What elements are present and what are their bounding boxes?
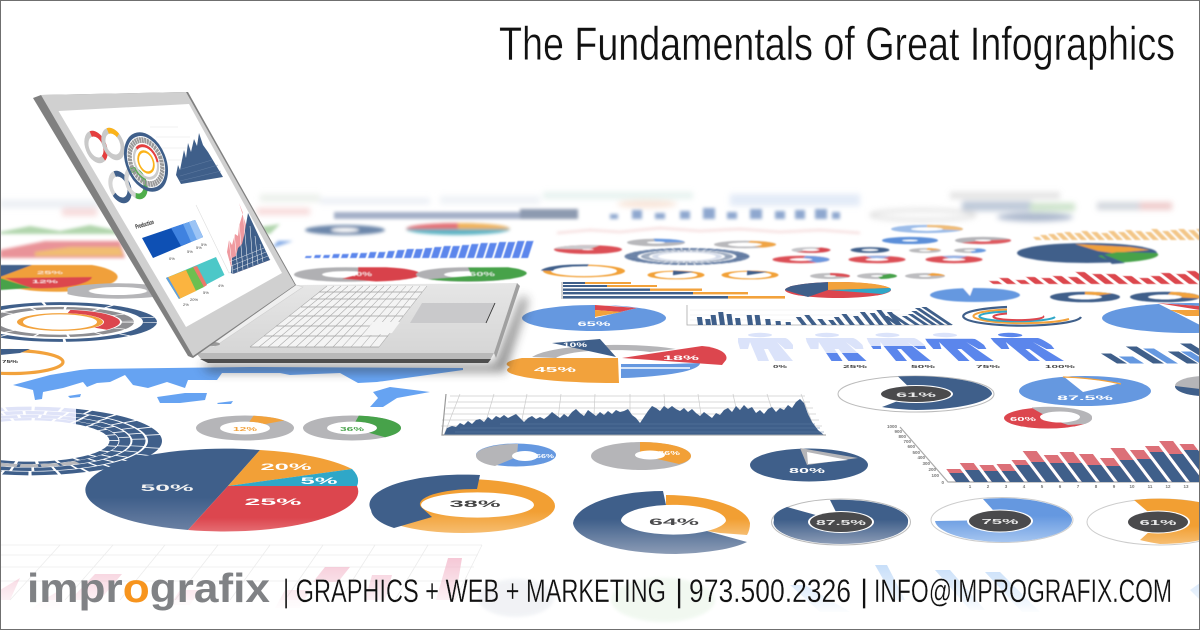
pie light blue 95% bbox=[930, 288, 1020, 302]
pie navy orange green bbox=[1017, 243, 1158, 264]
stacked bars chart: 1 bbox=[969, 484, 972, 489]
main pie chart: 25% bbox=[244, 497, 303, 508]
person 100% bbox=[986, 333, 1075, 369]
stacked bars chart: 5 bbox=[1041, 484, 1044, 489]
stacked bars chart: 0 bbox=[941, 480, 944, 485]
left pie navy orange red green: 12% bbox=[32, 279, 58, 284]
donut 64% bbox=[573, 491, 750, 554]
donut 61% orange bbox=[1087, 499, 1200, 545]
donut 87.5% navy bbox=[772, 499, 910, 545]
pie navy orange teal red bbox=[785, 282, 891, 298]
screen blue bar: 5% bbox=[201, 242, 207, 247]
teal slice 5% bbox=[228, 469, 358, 486]
donut 36% bbox=[310, 417, 394, 439]
screen label Production: Production bbox=[135, 219, 155, 231]
small pie 66% bbox=[476, 444, 556, 466]
pie 87.5% light blue: 87.5% bbox=[1057, 395, 1114, 402]
stacked bars chart: 400 bbox=[917, 455, 925, 460]
screen donut yellow bbox=[100, 128, 126, 160]
laptop lid bbox=[33, 92, 296, 358]
stacked bars chart: 11 bbox=[1148, 484, 1153, 489]
donut 87.5% navy: 87.5% bbox=[816, 520, 868, 527]
grey arcs bbox=[532, 345, 676, 358]
red slice 25% bbox=[188, 486, 358, 531]
horizontal bars bbox=[562, 282, 785, 299]
person 75% bbox=[922, 333, 1000, 369]
blue bar chart behind laptop bbox=[305, 241, 534, 258]
stacked bars chart: 8 bbox=[1095, 484, 1098, 489]
stacked bars chart: 800 bbox=[898, 434, 906, 439]
person 50% bbox=[865, 333, 935, 369]
footer contact line: | GRAPHICS + WEB + MARKETING bbox=[283, 573, 666, 609]
exploded pie 45%: 18% bbox=[663, 355, 700, 362]
red wedge bbox=[622, 346, 727, 365]
navy wedge bbox=[552, 339, 616, 357]
left orange ring: 75% bbox=[2, 359, 18, 364]
person 50%: 50% bbox=[911, 364, 935, 369]
partial donut far right bbox=[1175, 376, 1200, 396]
left grey donut bbox=[76, 285, 160, 297]
laptop base bbox=[193, 283, 520, 363]
faded ellipses bbox=[478, 578, 715, 622]
donut 75% blue: 75% bbox=[982, 519, 1021, 526]
donut 64%: 64% bbox=[649, 517, 699, 527]
footer contact line: | bbox=[675, 573, 683, 609]
blue arcs bbox=[621, 363, 700, 378]
bar chart navy bbox=[687, 305, 953, 325]
pie 87.5% light blue bbox=[1019, 376, 1151, 406]
left concentric rings bbox=[0, 304, 150, 340]
donut grey blue bbox=[635, 240, 677, 245]
stacked bars chart: 9 bbox=[1113, 484, 1116, 489]
keyboard bbox=[250, 286, 427, 347]
screen blue bar: 5% bbox=[196, 245, 202, 250]
laptop bbox=[33, 92, 528, 372]
orange slice 20% bbox=[228, 450, 352, 486]
stacked bars chart: 900 bbox=[894, 429, 902, 434]
screen donut navy small bbox=[107, 171, 133, 203]
stacked bars chart: 12 bbox=[1165, 484, 1171, 489]
screen multicolor bar: 5% bbox=[203, 290, 209, 295]
stacked bars chart: 4 bbox=[1023, 484, 1026, 489]
donut orange ring bbox=[651, 271, 701, 279]
person 100%: 100% bbox=[1045, 364, 1075, 369]
pie blue 65% bbox=[522, 305, 666, 331]
stacked bars chart: 7 bbox=[1077, 484, 1080, 489]
bar chart navy and blue right bbox=[1085, 344, 1200, 364]
main pie chart: 5% bbox=[300, 476, 338, 486]
donut grey orange bbox=[717, 241, 773, 248]
footer contact line bbox=[283, 573, 1172, 609]
left orange ring bbox=[0, 349, 63, 374]
donut 36%: 36% bbox=[340, 427, 364, 433]
faded reflection chart footer bbox=[0, 545, 1200, 625]
top right blurred charts bbox=[565, 226, 1200, 264]
screen donut green bbox=[123, 167, 149, 199]
footer contact line: 973.500.2326 bbox=[689, 573, 851, 609]
screen multicolor bar bbox=[166, 257, 224, 307]
rainbow arc bbox=[963, 307, 1081, 326]
label 60%: 60% bbox=[469, 272, 496, 278]
stacked bars chart: 700 bbox=[903, 439, 911, 444]
pie blue 65%: 65% bbox=[578, 321, 611, 328]
stacked bars chart: 3 bbox=[1005, 484, 1008, 489]
donut 60% red bbox=[1004, 407, 1092, 428]
screen multicolor bar: 4% bbox=[218, 283, 224, 288]
donut green grey behind laptop bbox=[428, 267, 527, 281]
donut 12%: 12% bbox=[233, 427, 257, 433]
donut 38%: 38% bbox=[450, 499, 500, 509]
stacked bars chart bbox=[887, 424, 1200, 489]
area chart bbox=[441, 394, 826, 435]
navy slice 50% bbox=[85, 449, 260, 530]
pie 80% navy bbox=[750, 448, 868, 482]
footer contact line: | bbox=[860, 573, 868, 609]
screen multicolor bar: 2% bbox=[183, 302, 189, 307]
screen multicolor bar: 20% bbox=[190, 297, 198, 302]
donut orange ring bbox=[725, 271, 775, 279]
main pie chart: 20% bbox=[260, 462, 312, 472]
segmented ring bbox=[631, 249, 743, 264]
stacked bars chart: 300 bbox=[922, 461, 930, 466]
screen stacked bars bbox=[196, 203, 271, 274]
stacked bars chart: 200 bbox=[928, 467, 936, 472]
donut orange navy bbox=[545, 265, 623, 277]
hinge bbox=[206, 285, 303, 347]
world map bbox=[13, 367, 463, 407]
far blurred charts row bbox=[0, 192, 1172, 222]
exploded pie 45%: 10% bbox=[563, 342, 587, 349]
screen bbox=[58, 104, 282, 327]
orange wedge bbox=[507, 358, 619, 383]
pie 80% navy: 80% bbox=[789, 468, 827, 475]
gray green small donuts bbox=[817, 274, 843, 278]
person 0% bbox=[738, 333, 793, 369]
donut red bbox=[565, 246, 611, 253]
donut 38% bbox=[369, 475, 555, 533]
donut 12% bbox=[202, 417, 288, 439]
stacked bars chart: 500 bbox=[912, 450, 920, 455]
small faded donuts row 2 bbox=[308, 265, 942, 282]
person 0%: 0% bbox=[773, 364, 787, 369]
segmented concentric ring chart bbox=[0, 407, 160, 475]
stacked bars chart: 600 bbox=[907, 444, 915, 449]
screen donut red bbox=[83, 131, 109, 163]
left pie navy orange red green bbox=[0, 265, 118, 292]
screen radial chart bbox=[118, 128, 174, 196]
label 40%: 40% bbox=[350, 272, 373, 278]
red bars bbox=[976, 271, 1200, 284]
donut 75% blue bbox=[931, 498, 1073, 542]
donut red grey bbox=[960, 238, 1006, 243]
left pie navy orange red green: 25% bbox=[37, 270, 63, 275]
screen blue bar bbox=[142, 220, 207, 261]
small donut row bbox=[778, 247, 985, 263]
stacked bars chart: 2 bbox=[987, 484, 990, 489]
screen blue bar: 5% bbox=[187, 249, 193, 254]
navy orange donuts upper right bbox=[1059, 292, 1195, 302]
stacked bars chart: 13 bbox=[1183, 484, 1189, 489]
screen blue bar: 0% bbox=[169, 256, 175, 261]
person 25%: 25% bbox=[843, 364, 867, 369]
large blue pie right bbox=[1102, 303, 1200, 333]
exploded pie 45%: 45% bbox=[534, 365, 577, 374]
laptop shadow bbox=[200, 295, 528, 372]
screen area chart bbox=[150, 127, 223, 184]
pie 61% navy with dark centre bbox=[838, 376, 994, 412]
person 25% bbox=[804, 333, 867, 369]
blurred chart row: bars and pies behind laptop bbox=[0, 208, 860, 258]
stacked bars chart: 100 bbox=[931, 473, 939, 478]
person 75%: 75% bbox=[976, 364, 1000, 369]
people pictogram bbox=[738, 333, 1075, 369]
screen charts bbox=[83, 127, 271, 307]
donut 61% orange: 61% bbox=[1140, 520, 1179, 527]
stacked bars chart: 10 bbox=[1129, 484, 1135, 489]
main pie chart: 50% bbox=[140, 483, 195, 494]
stacked bars chart: 1000 bbox=[887, 424, 897, 429]
small pie 66%: 66% bbox=[536, 454, 555, 460]
stacked bars chart: 6 bbox=[1059, 484, 1062, 489]
main pie chart bbox=[85, 449, 358, 531]
orange bars faded bbox=[1025, 229, 1200, 240]
small pie 36% bbox=[591, 442, 691, 470]
small pie 36%: 36% bbox=[658, 451, 680, 457]
donut red grey behind laptop bbox=[308, 267, 421, 282]
pie 61% navy with dark centre: 61% bbox=[896, 392, 937, 399]
exploded pie 45% bbox=[507, 339, 727, 383]
donut blue and orange bbox=[901, 226, 953, 232]
trackpad bbox=[410, 303, 495, 323]
donut 60% red: 60% bbox=[1010, 417, 1036, 423]
logo imprografix: imprografix bbox=[27, 565, 270, 611]
donut blue bbox=[892, 238, 928, 243]
